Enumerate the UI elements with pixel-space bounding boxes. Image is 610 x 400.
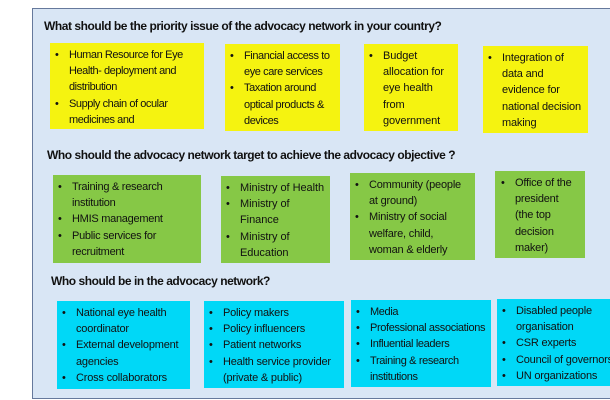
card: coordinators and agencies: External development [76,339,178,351]
card: coordinators and agencies [57,301,190,389]
card: human resources and supply chain: Human Resource for Eye [69,49,183,61]
card: training, HMIS and public services: recruitment [72,246,124,258]
card: training, HMIS and public services: institution [72,197,116,209]
card: ministries: Ministry of [240,198,290,210]
card: coordinators and agencies: agencies [76,356,118,368]
card: media and professional groups: Influential leaders [370,338,449,350]
card: media and professional groups: Training & research [370,355,459,367]
card: media and professional groups: Media [370,306,398,318]
card: community and social welfare [350,173,475,260]
card: ministries: Finance [240,214,279,226]
card: human resources and supply chain: Health- deployment and [69,65,176,77]
card: coordinators and agencies: Cross collaborators [76,372,167,384]
card: office of the president [495,171,585,258]
card: training, HMIS and public services: Public services for [72,230,156,242]
card: data integration: data and [502,68,543,80]
card: community and social welfare: Ministry of social [369,211,447,223]
card: ministries: Ministry of Health [240,182,324,194]
card: policy and patient networks: Policy influencers [223,323,305,335]
card: budget allocation: Budget [383,50,417,62]
card: budget allocation: allocation for [383,66,444,78]
card: community and social welfare: Community (people [369,179,461,191]
card: budget allocation: from [383,99,405,111]
card: training, HMIS and public services: Training & research [72,181,162,193]
card: disabled people, CSR, governors, UN: Disabled people [516,305,592,317]
card: office of the president: (the top [515,209,551,221]
card: office of the president: maker) [515,242,548,254]
card: media and professional groups [351,300,491,387]
card: office of the president: decision [515,226,554,238]
card: financial access and taxation: Financial access to [244,50,330,62]
card: human resources and supply chain: distribution [69,81,117,93]
card: budget allocation: eye health [383,82,433,94]
card: financial access and taxation [225,44,340,131]
card: disabled people, CSR, governors, UN: CSR experts [516,337,576,349]
card: human resources and supply chain: Supply chain of ocular [69,98,168,110]
card: policy and patient networks: Policy makers [223,307,289,319]
card: community and social welfare: woman & elderly [369,244,447,256]
card: ministries: Ministry of [240,231,290,243]
card: human resources and supply chain [50,43,204,129]
card: financial access and taxation: Taxation around [244,82,316,94]
card: community and social welfare: welfare, child, [369,228,433,240]
card: policy and patient networks: Patient networks [223,339,301,351]
card: policy and patient networks: (private & public) [223,372,302,384]
card: coordinators and agencies: coordinator [76,323,129,335]
card: disabled people, CSR, governors, UN: Council of governors [516,354,610,366]
card: policy and patient networks: Health service provider [223,356,331,368]
card: disabled people, CSR, governors, UN [497,299,610,386]
card: media and professional groups: Professional associations [370,322,485,334]
card: financial access and taxation: devices [244,115,278,127]
card: policy and patient networks [204,301,344,388]
card: data integration: making [502,117,536,129]
card: disabled people, CSR, governors, UN: UN organizations [516,370,597,382]
card: budget allocation: government [383,115,440,127]
card: ministries [221,176,330,263]
heading: advocacy target: Who should the advocacy network target to achieve the advocacy objective ? [47,148,455,162]
card: community and social welfare: at ground) [369,195,417,207]
card: financial access and taxation: optical products & [244,99,324,111]
card: media and professional groups: institutions [370,371,418,383]
card: training, HMIS and public services [53,175,201,263]
card: data integration: evidence for [502,84,560,96]
card: budget allocation [364,44,458,131]
card: data integration [483,46,588,133]
card: data integration: national decision [502,101,581,113]
card: disabled people, CSR, governors, UN: organisation [516,321,574,333]
card: office of the president: president [515,193,558,205]
heading: network membership: Who should be in the advocacy network? [51,274,270,288]
card: training, HMIS and public services: HMIS management [72,213,163,225]
card: human resources and supply chain: medicines and [69,114,134,126]
card: office of the president: Office of the [515,177,572,189]
card: data integration: Integration of [502,52,564,64]
card: financial access and taxation: eye care services [244,66,322,78]
heading: priority issue: What should be the priority issue of the advocacy network in your country? [44,19,441,33]
card: ministries: Education [240,247,288,259]
card: coordinators and agencies: National eye health [76,307,166,319]
